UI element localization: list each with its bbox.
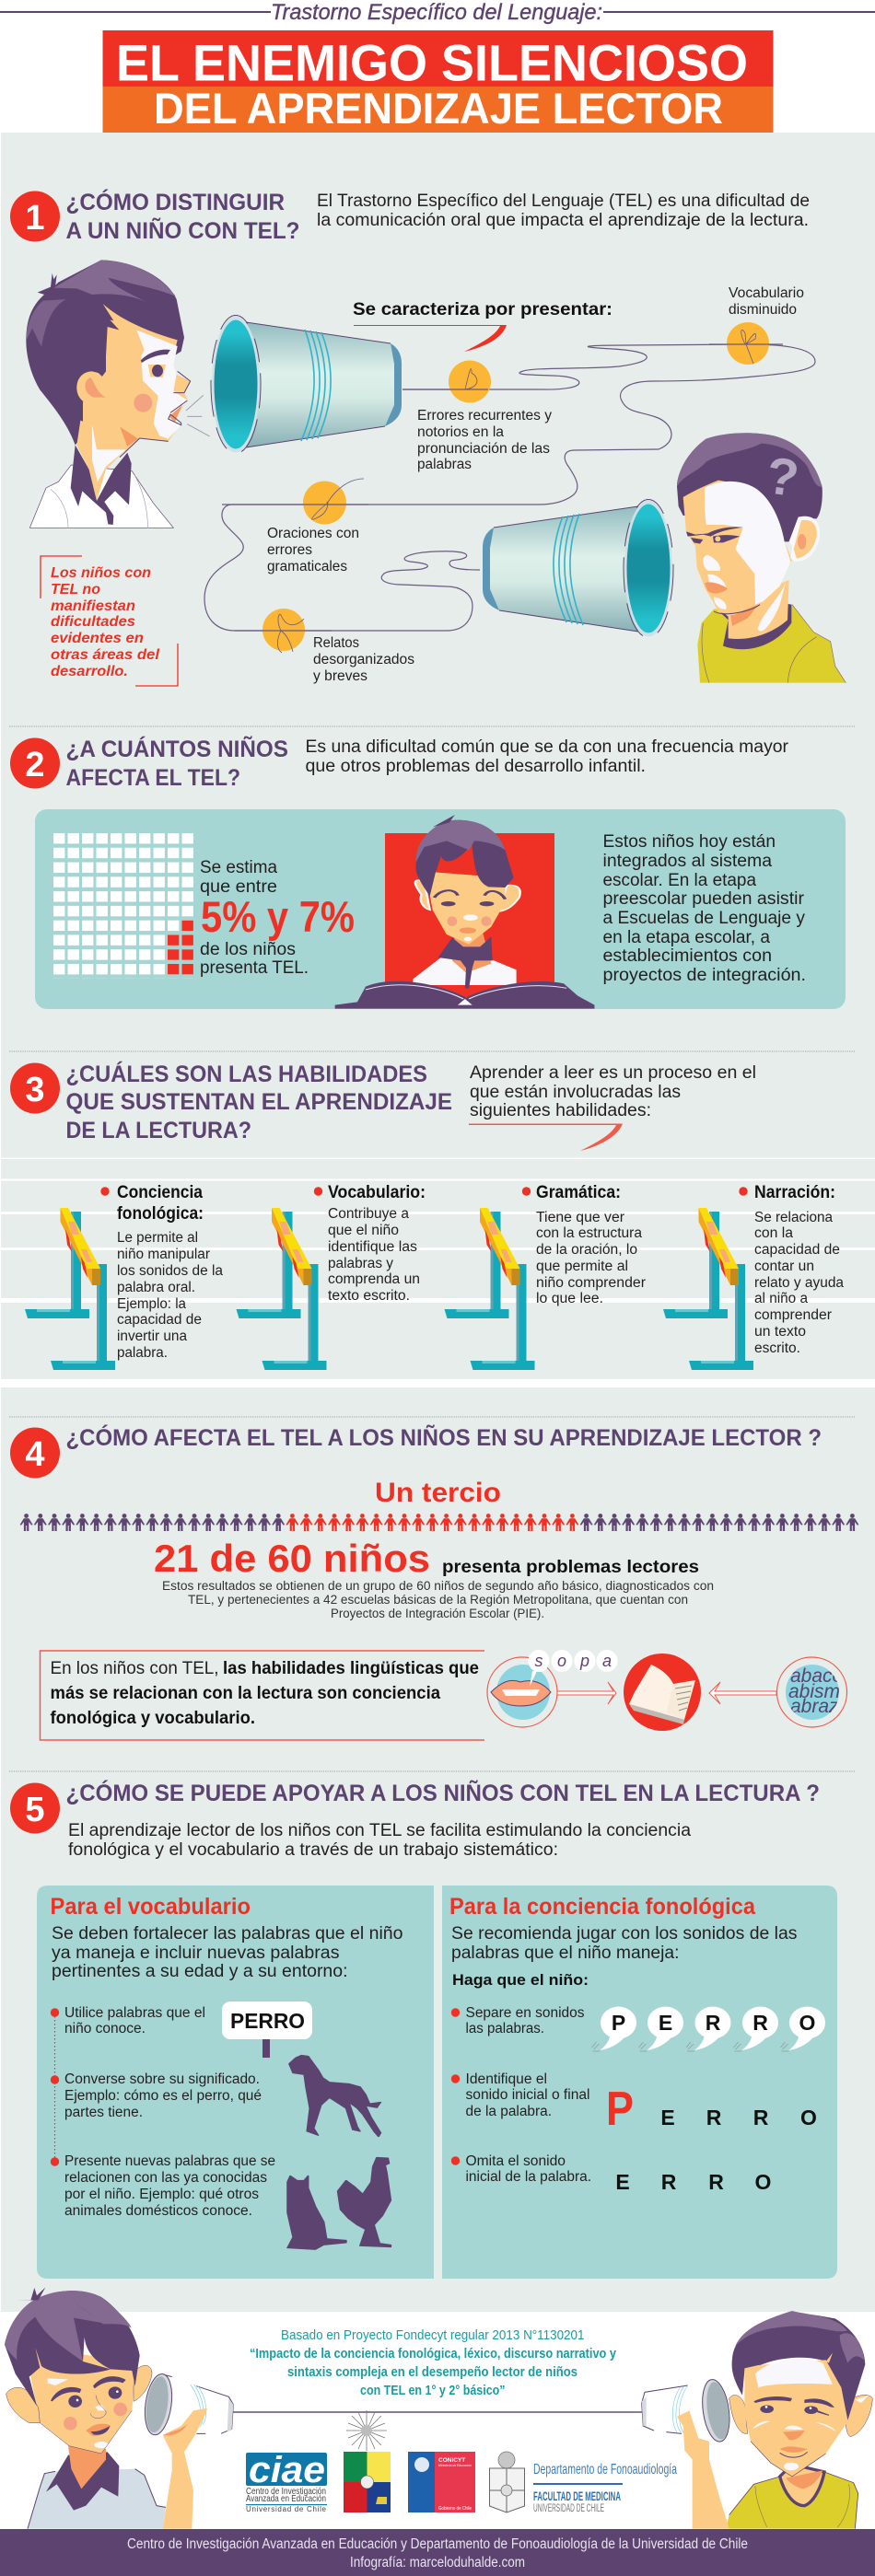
header: supertitle: Trastorno Específico del Lenguaje: [271,0,602,25]
panel intro: Se deben fortalecer las palabras que el niño [52,1924,402,1944]
panel heading: Para la conciencia fonológica [449,1894,756,1920]
logo: universidad de chile shield [344,2410,391,2512]
label: vocabulary: disminuido [729,302,797,318]
skill: gramatica: Gramática: [536,1183,621,1202]
statistic: 21 de 60: presenta problemas lectores [442,1558,699,1577]
skill: narracion [663,1183,844,1370]
callout: no other difficulties: evidentes en [51,631,144,646]
letters erro [615,2170,771,2194]
logo: ciae [246,2450,327,2513]
callout: linguistic skills [41,1651,484,1740]
callout: no other difficulties: manifiestan [51,598,135,614]
letters erro: O [755,2170,771,2194]
skill: vocabulario: texto escrito. [328,1288,410,1304]
skill: conciencia fonologica: palabra oral. [117,1280,195,1295]
section 5 heading: 5 [25,1791,45,1829]
icon: word list: abrazo [790,1696,850,1717]
icon: mouth with letters [487,1650,617,1727]
panel intro: Haga que el niño: [452,1971,589,1989]
skill: gramatica: que permite al [536,1259,628,1274]
speech bubbles perro: O [799,2011,815,2035]
skill: vocabulario [236,1183,426,1370]
logo: ciae: Centro de Investigación [246,2486,326,2497]
section 2 heading: 2 [25,746,45,784]
panel: para la conciencia fonologica [442,1886,837,2279]
icon: rooster [338,2157,391,2247]
letters erro: R [708,2170,724,2194]
logo: ciae: Avanzada en Educación [246,2493,326,2504]
callout: no other difficulties: TEL no [51,582,100,598]
label: vocabulary [729,285,804,318]
tip 3: animales domésticos conoce. [64,2203,252,2219]
illustration: boy with cup left [5,2287,233,2529]
footer band: Infografía: marceloduhalde.com [350,2555,525,2570]
letters big p: P [606,2083,634,2136]
section 1 heading [10,188,300,244]
skill: vocabulario: palabras y [328,1256,393,1271]
label: errors: Errores recurrentes y [417,408,552,424]
tip c [451,2153,591,2185]
text: schooling: preescolar pueden asistir [602,889,805,909]
text: department: Departamento de Fonoaudiología [533,2462,677,2477]
label: errors: palabras [417,457,472,472]
skill: conciencia fonologica: Conciencia [117,1183,203,1202]
callout: no other difficulties: desarrollo. [51,664,128,679]
skill: narracion: capacidad de [754,1242,840,1258]
speech bubbles perro [591,2007,825,2051]
section 3 intro text: siguientes habilidades: [470,1101,651,1120]
skill: narracion: un texto [754,1324,806,1340]
section 4 heading: 4 [25,1435,45,1474]
text: department: FACULTAD DE MEDICINA [533,2489,621,2503]
tip b [451,2071,589,2119]
text: schooling: proyectos de integración. [602,966,806,985]
divider [9,726,856,1771]
letters big p [606,2083,817,2136]
tip 3: por el niño. Ejemplo: qué otros [64,2187,259,2202]
skill: conciencia fonologica: Ejemplo: la [117,1296,186,1312]
speech bubbles perro: E [659,2011,672,2035]
letters big p: R [753,2106,769,2129]
skill: conciencia fonologica: niño manipular [117,1247,210,1262]
section 3 intro text: que están involucradas las [470,1083,681,1102]
statistic: 21 de 60: 21 de 60 niños [154,1537,430,1580]
skill: conciencia fonologica: palabra. [117,1345,168,1361]
section 5 intro text: fonológica y el vocabulario a través de un trabajo sistemático: [68,1840,558,1860]
letters erro: E [615,2170,630,2194]
statistic: 21 de 60 [154,1537,699,1580]
title block: EL ENEMIGO SILENCIOSO [116,33,748,92]
tip c: Omita el sonido [466,2153,566,2169]
callout: no other difficulties: dificultades [51,614,135,630]
icon: mouth with letters: s [534,1652,543,1670]
section 2 heading [10,735,288,791]
label: stories [313,635,414,684]
text: schooling: integrados al sistema [602,852,772,871]
skill: gramatica: de la oración, lo [536,1242,637,1258]
skill: narracion: al niño a [754,1291,808,1306]
illustration: confused boy: ? [763,447,802,508]
study note: TEL, y pertenecientes a 42 escuelas básicas de la Región Metropolitana, que cuentan con [188,1593,688,1607]
skill: vocabulario: identifique las [328,1239,417,1255]
people row 21 of 60 [19,1514,859,1531]
skill: narracion: Se relaciona [754,1210,833,1225]
study note: Estos resultados se obtienen de un grupo de 60 niños de segundo año básico, diagnosticados con [162,1579,714,1593]
icon: word list: abismo [788,1681,851,1702]
tip 3: relacionen con las ya conocidas [64,2170,267,2186]
credits: project reference: con TEL en 1° y 2° básico” [360,2383,505,2398]
panel intro: ya maneja e incluir nuevas palabras [52,1944,339,1963]
logo: ciae: Universidad de Chile [246,2505,327,2513]
label: stories: desorganizados [313,652,414,667]
letters big p: R [706,2106,722,2129]
icon: word list [777,1657,851,1727]
skill: conciencia fonologica: capacidad de [117,1312,202,1328]
tip 1: Utilice palabras que el [64,2005,205,2021]
panel intro [52,1924,402,1981]
white shelves [0,1158,875,1387]
text: schooling: escolar. En la etapa [602,871,756,890]
logo: conicyt [408,2452,475,2512]
tip b: sonido inicial o final [466,2087,589,2103]
skill: conciencia fonologica: fonológica: [117,1204,204,1224]
text: schooling: establecimientos con [602,946,772,966]
bullet timeline [51,2008,59,2166]
section 1 heading: ¿CÓMO DISTINGUIR [66,188,285,215]
skill: narracion: comprender [754,1307,832,1323]
tip 2: Converse sobre su significado. [64,2071,260,2087]
label: errors: pronunciación de las [417,441,550,457]
text: schooling: a Escuelas de Lenguaje y [602,909,805,928]
label: stories: Relatos [313,635,359,651]
skill: gramatica [444,1183,646,1370]
text: department: UNIVERSIDAD DE CHILE [533,2503,604,2514]
tip 3 [64,2153,275,2219]
section 5 intro text: El aprendizaje lector de los niños con TEL se facilita estimulando la conciencia [68,1821,691,1840]
section 1 intro text: la comunicación oral que impacta el aprendizaje de la lectura. [317,211,809,230]
letters big p: O [800,2106,817,2129]
callout: linguistic skills: las habilidades lingüísticas que [223,1659,479,1678]
knots: yellow circles on the string [222,322,783,653]
panel: para el vocabulario [37,1886,434,2279]
letters erro: R [661,2170,677,2194]
study note: Proyectos de Integración Escolar (PIE). [331,1607,544,1620]
section 4 heading [10,1423,822,1479]
tip 2: partes tiene. [64,2105,143,2120]
string between bottom cups [233,2411,642,2413]
logo: ciae: ciae [249,2450,325,2490]
credits: project reference: “Impacto de la conciencia fonológica, léxico, discurso narrativo y [250,2346,617,2361]
label: sentences [267,526,359,574]
label: sentences: Oraciones con [267,526,359,541]
skill: narracion: con la [754,1225,793,1241]
tip b: Identifique el [466,2071,547,2087]
section 3 heading: QUE SUSTENTAN EL APRENDIZAJE [66,1089,452,1115]
section 3 intro text [469,1063,756,1151]
skill: vocabulario: que el niño [328,1223,399,1238]
statistic text [200,858,355,978]
panel intro: Se recomienda jugar con los sonidos de las [451,1924,798,1944]
section 3 heading: 3 [25,1071,45,1109]
skill: vocabulario: comprenda un [328,1271,420,1287]
section 2 intro text: Es una dificultad común que se da con una frecuencia mayor [306,737,789,757]
skill: conciencia fonologica [25,1183,223,1370]
footer band [0,2529,875,2576]
tip c: inicial de la palabra. [466,2169,591,2185]
skill: gramatica: Tiene que ver [536,1210,624,1225]
callout: linguistic skills: fonológica y vocabulario. [50,1709,255,1728]
tip a [451,2005,585,2036]
cup left [211,315,402,453]
skill: vocabulario: Vocabulario: [328,1183,426,1202]
icon: dog [289,2055,380,2137]
arrow: to book [557,1682,616,1704]
footer band: Centro de Investigación Avanzada en Educación y Departamento de Fonoaudiología de la Universidad de Chile [127,2536,748,2552]
subheading: characteristics: Se caracteriza por presentar: [353,300,612,319]
panel intro: palabras que el niño maneja: [451,1944,680,1963]
tip a: Separe en sonidos [466,2005,585,2021]
skill: narracion: contar un [754,1259,814,1274]
icon: cat [287,2176,346,2249]
section 1 heading: A UN NIÑO CON TEL? [66,216,300,244]
letters big p: E [660,2106,675,2129]
label: stories: y breves [313,668,368,684]
section 5 intro text [68,1821,691,1860]
label: sentences: errores [267,542,312,558]
skill: conciencia fonologica: invertir una [117,1329,187,1344]
sign: perro [222,2002,312,2058]
section 2 heading: ¿A CUÁNTOS NIÑOS [66,735,288,762]
panel intro: pertinentes a su edad y a su entorno: [52,1962,348,1981]
skill: conciencia fonologica: Le permite al [117,1230,198,1246]
section 5 heading [10,1779,820,1834]
icon: open book [624,1654,701,1731]
tip 3: Presente nuevas palabras que se [64,2153,275,2169]
sign: perro: PERRO [230,2009,305,2033]
label: errors [417,408,552,472]
skill: narracion: Narración: [754,1183,835,1202]
section 2 intro text: que otros problemas del desarrollo infantil. [306,757,646,776]
callout: no other difficulties: Los niños con [51,565,151,581]
icon: word list: ábaco [790,1665,844,1687]
panel: prevalence [35,809,846,1009]
skill: gramatica: con la estructura [536,1225,642,1241]
skill: conciencia fonologica: los sonidos de la [117,1263,223,1279]
text: schooling [602,832,806,985]
skill: narracion: relato y ayuda [754,1275,844,1291]
statistic text: de los niños [200,940,296,959]
callout: linguistic skills: más se relacionan con la lectura son conciencia [50,1684,440,1703]
tip b: de la palabra. [466,2104,552,2119]
credits: project reference [250,2327,617,2398]
cup right [483,499,673,637]
text: department [533,2462,677,2514]
section 2 heading: AFECTA EL TEL? [66,765,240,791]
section 3 intro text: Aprender a leer es un proceso en el [470,1063,756,1083]
statistic: un tercio: Un tercio [375,1478,501,1508]
label: sentences: gramaticales [267,559,347,574]
section 2 intro text [306,737,789,776]
speech bubbles perro: R [706,2011,721,2035]
tip a: las palabras. [466,2021,544,2036]
panel intro [451,1924,798,1989]
section 1 heading: 1 [25,199,45,238]
tip 1 [64,2005,205,2036]
logo: conicyt: Ministerio de Educación [438,2463,472,2467]
section 1 intro text: El Trastorno Específico del Lenguaje (TEL) es una dificultad de [317,191,810,211]
section 1 intro text [317,191,810,230]
text: schooling: en la etapa escolar, a [602,928,770,947]
speech bubbles perro: R [752,2011,768,2035]
title block [103,30,774,133]
speech bubbles perro: P [612,2011,625,2035]
callout: linguistic skills: En los niños con TEL, [50,1659,219,1678]
illustration: boy reading [335,815,594,1009]
text: schooling: Estos niños hoy están [602,832,776,852]
skill: gramatica: lo que lee. [536,1291,603,1306]
label: errors: notorios en la [417,424,504,440]
logo: conicyt: Gobierno de Chile [438,2506,472,2512]
skill: vocabulario: Contribuye a [328,1206,409,1222]
section 3 heading: ¿CUÁLES SON LAS HABILIDADES [66,1061,427,1087]
illustration: boy with cup right [626,2311,872,2529]
logo: conicyt: CONICYT [438,2457,465,2464]
illustration: boy speaking [26,260,210,528]
subheading: characteristics [353,300,612,352]
tip 2 [64,2071,262,2120]
icon: mouth with letters: a [602,1652,612,1670]
title block: DEL APRENDIZAJE LECTOR [154,84,723,133]
tip 2: Ejemplo: cómo es el perro, qué [64,2088,262,2104]
grid of squares 7 of 100 [53,833,196,979]
section 3 heading [10,1061,452,1143]
callout: no other difficulties: otras áreas del [51,647,160,663]
credits: project reference: Basado en Proyecto Fondecyt regular 2013 N°1130201 [281,2327,584,2343]
skill: gramatica: niño comprender [536,1275,646,1291]
section 3 heading: DE LA LECTURA? [66,1118,251,1143]
statistic text: Se estima [200,858,277,877]
icon: mouth with letters: p [579,1652,589,1670]
arrow: from vocabulary [709,1682,776,1704]
section 5 heading: ¿CÓMO SE PUEDE APOYAR A LOS NIÑOS CON TEL EN LA LECTURA ? [66,1779,820,1806]
tip 1: niño conoce. [64,2021,146,2036]
icon: mouth with letters: o [557,1652,566,1670]
section 4 heading: ¿CÓMO AFECTA EL TEL A LOS NIÑOS EN SU APRENDIZAJE LECTOR ? [66,1423,822,1451]
credits: project reference: sintaxis compleja en el desempeño lector de niños [287,2364,578,2380]
callout: no other difficulties [41,556,178,686]
panel heading: Para el vocabulario [50,1894,251,1920]
study note [162,1579,714,1620]
skill: narracion: escrito. [754,1340,800,1356]
label: vocabulary: Vocabulario [729,285,804,301]
statistic text: 5% y 7% [201,892,355,941]
statistic text: presenta TEL. [200,958,309,978]
illustration: confused boy [677,433,846,683]
statistic text: que entre [200,877,277,897]
logo: facultad shield [490,2452,525,2512]
string between cups [204,344,815,631]
